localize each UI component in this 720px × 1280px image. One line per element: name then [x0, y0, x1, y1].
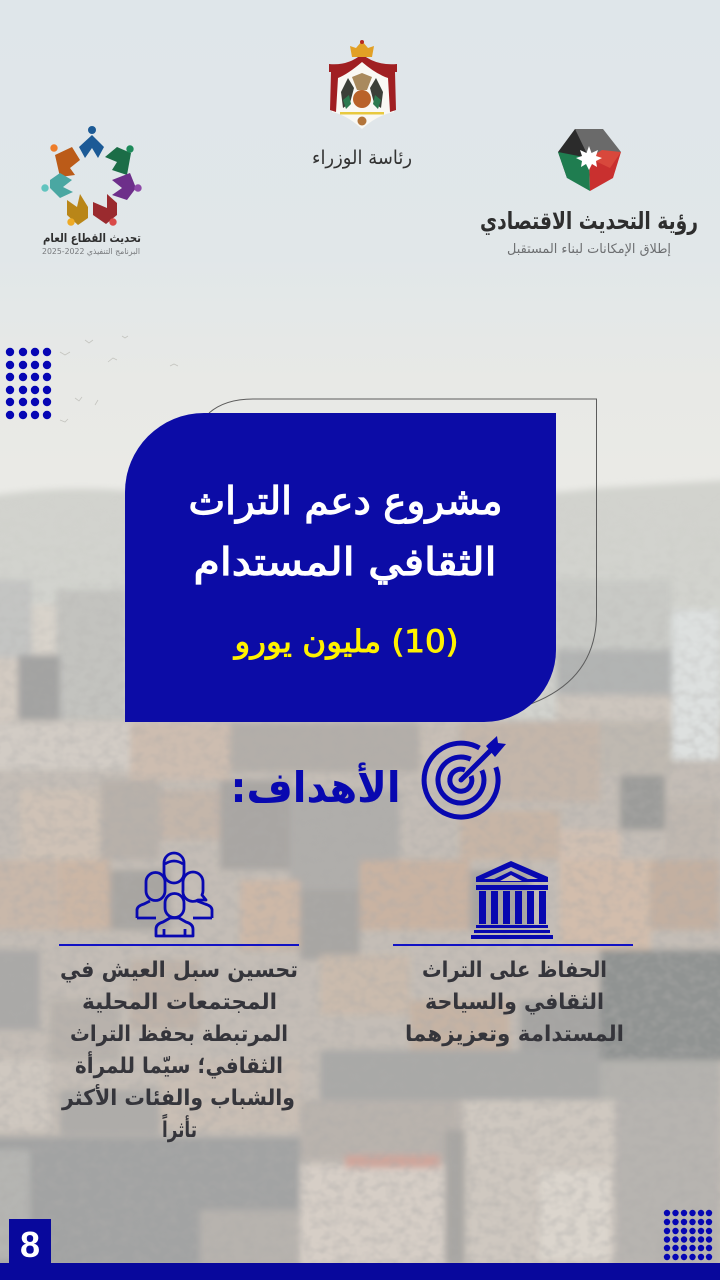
logo subtitle: البرنامج التنفيذي 2022-2025 [42, 247, 140, 256]
objective text: تأثراً [162, 1113, 197, 1143]
objectives label: الأهداف: [230, 762, 400, 812]
objective text: الثقافي؛ سيّما للمرأة [75, 1050, 283, 1079]
logo title: تحديث القطاع العام [43, 231, 141, 246]
icon: ring of seven figures [41, 126, 142, 226]
divider [59, 944, 299, 946]
objective: improve livelihoods [59, 853, 299, 1143]
logo: coat of arms and prime ministry [312, 40, 412, 169]
panel outline [209, 399, 596, 706]
objective text [405, 958, 624, 1047]
objective text: المستدامة وتعزيزهما [405, 1022, 624, 1047]
footer bar [0, 1263, 720, 1280]
project title line 1: مشروع دعم التراث [188, 479, 502, 524]
objective text: الحفاظ على التراث [422, 958, 607, 983]
objective text: الثقافي والسياحة [425, 990, 604, 1015]
objective: preserve heritage [393, 861, 633, 1047]
dot pattern: top left [6, 348, 51, 419]
calligraphy: prime ministry: رئاسة الوزراء [312, 147, 412, 169]
budget: (10) مليون يورو [232, 624, 458, 660]
page number: 8 [20, 1224, 40, 1265]
objective text: والشباب والفئات الأكثر [61, 1083, 295, 1111]
icon: temple [471, 861, 553, 939]
icon: group of people [137, 853, 212, 936]
vision subtitle: إطلاق الإمكانات لبناء المستقبل [507, 242, 671, 257]
background: faded city photo [0, 336, 720, 1263]
panel: project title [125, 413, 556, 722]
objective text: المجتمعات المحلية [82, 990, 277, 1015]
icon: heptagon with star [558, 129, 621, 191]
dot pattern: bottom right [664, 1210, 712, 1260]
objective text: تحسين سبل العيش في [60, 958, 298, 983]
objective text [60, 958, 298, 1143]
logo: public sector modernization [41, 126, 142, 256]
icon: target [424, 736, 506, 817]
project title line 2: الثقافي المستدام [194, 540, 496, 584]
icon: coat of arms [329, 40, 397, 129]
divider [393, 944, 633, 946]
logo: economic modernization vision [480, 129, 698, 257]
page number [9, 1219, 51, 1265]
objective text: المرتبطة بحفظ التراث [70, 1022, 288, 1047]
heading: objectives [230, 736, 506, 817]
